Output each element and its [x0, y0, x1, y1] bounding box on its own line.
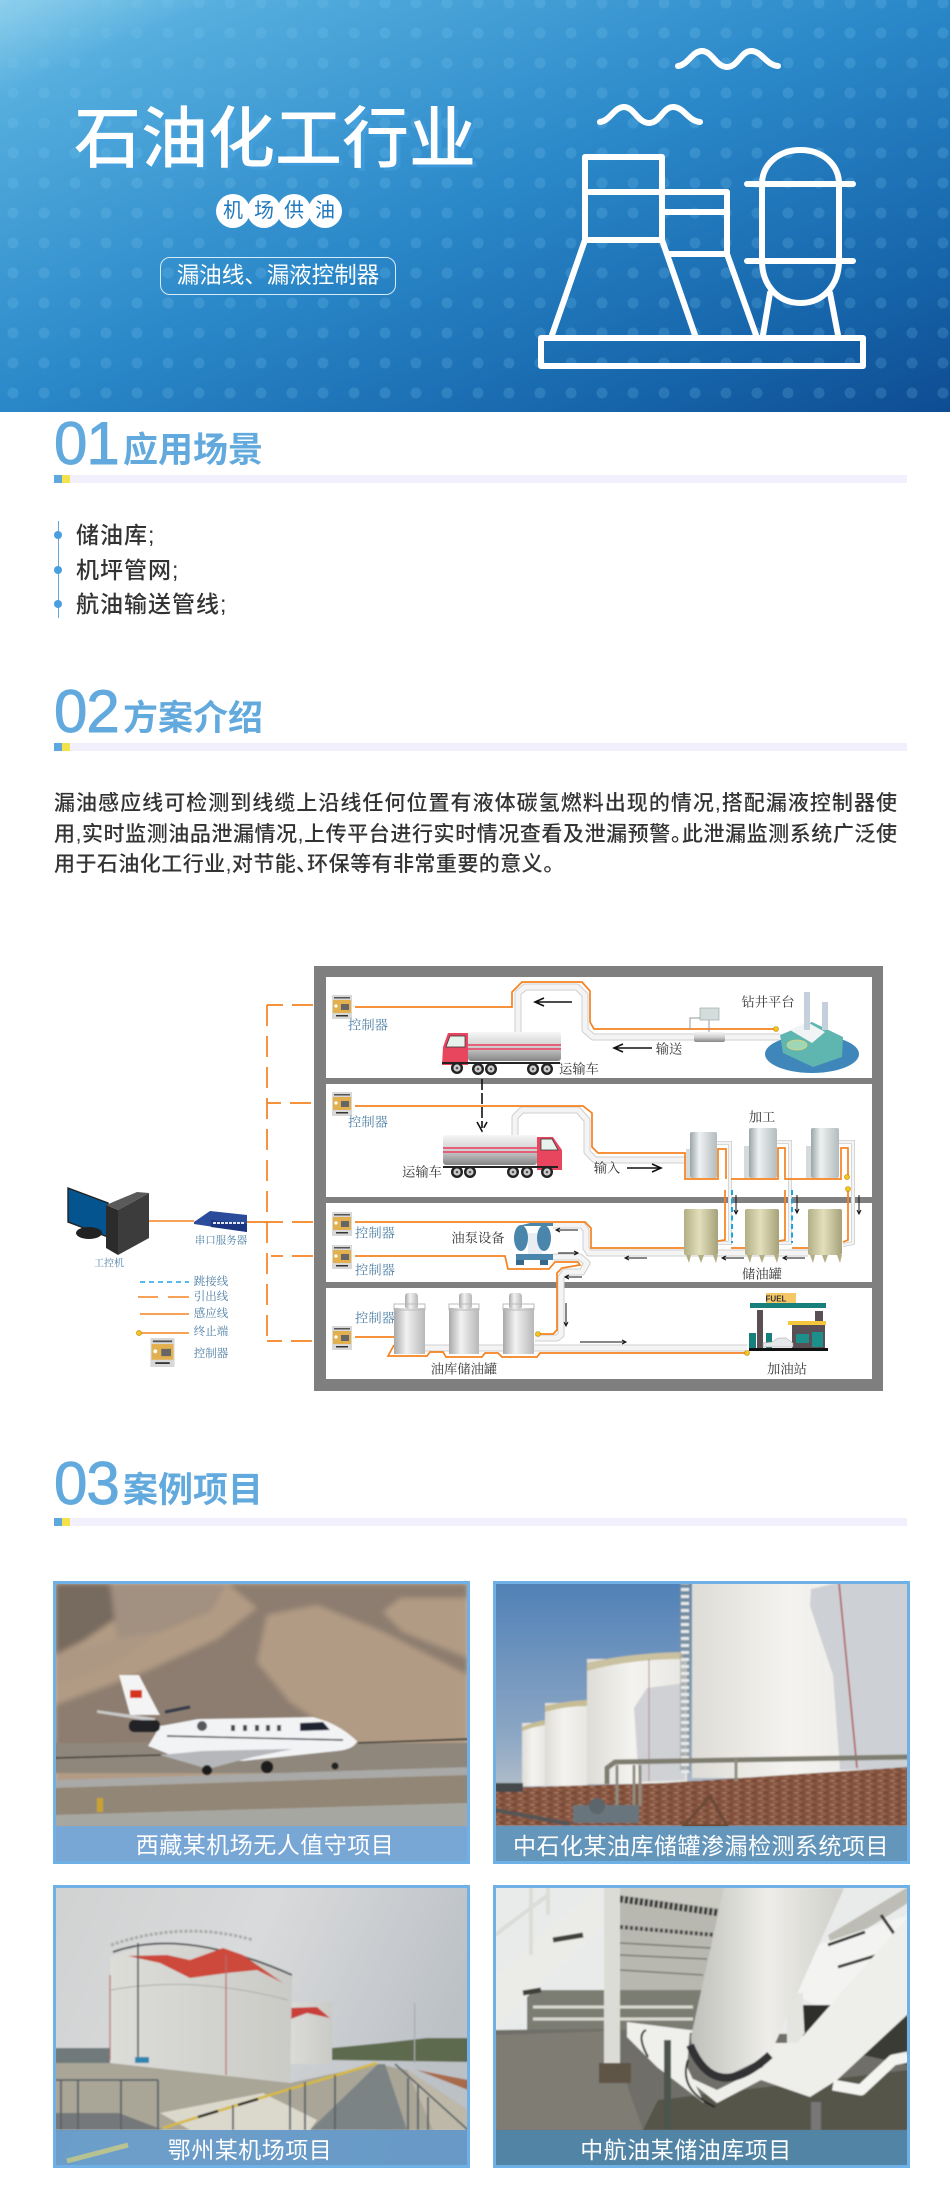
tanker truck 2: [443, 1135, 562, 1178]
solution paragraph: 用于石油化工行业,对节能、环保等有非常重要的意义。: [54, 853, 554, 876]
processing tanks: [686, 1128, 850, 1192]
header banner: [0, 0, 950, 412]
flow meter: [690, 1008, 725, 1042]
photo: CNAF oil depot: 中航油某储油库项目: [580, 2137, 792, 2163]
legend: 跳接线: [194, 1274, 229, 1288]
labels: 加工: [749, 1110, 775, 1124]
legend: 引出线: [194, 1289, 229, 1303]
section heading 01: 01: [54, 410, 119, 477]
product tag: 漏油线、漏液控制器: 漏油线、漏液控制器: [177, 263, 379, 288]
photo: Ezhou airport: [53, 1885, 470, 2168]
title: 石油化工行业: [74, 102, 476, 177]
subtitle pills: 机场供油: 油: [315, 200, 335, 222]
controllers: 控制器: [348, 1016, 388, 1032]
photo: Ezhou airport: 鄂州某机场项目: [168, 2137, 332, 2163]
application list: [54, 521, 62, 618]
photo: Sinopec tanks: [493, 1581, 910, 1864]
plane: [97, 1675, 357, 1775]
section heading 02: [54, 678, 907, 751]
labels: 输送: [656, 1042, 682, 1056]
solution paragraph: 用,实时监测油品泄漏情况,上传平台进行实时情况查看及泄漏预警。此泄漏监测系统广泛使: [54, 823, 897, 846]
section heading 03: 03: [54, 1450, 119, 1517]
sensing cable lines: [355, 982, 848, 1357]
section heading 02: 02: [54, 678, 119, 745]
photo: CNAF oil depot: [493, 1885, 910, 2168]
labels: 储油罐: [742, 1266, 782, 1282]
section heading 03: [54, 1450, 907, 1526]
legend: 终止端: [194, 1324, 229, 1338]
section heading 03: 案例项目: [123, 1471, 263, 1510]
storage tanks: [684, 1209, 842, 1263]
subtitle pills: 机场供油: [216, 194, 342, 228]
icon: fuel station: [744, 1293, 828, 1356]
photo: Tibet airport: [53, 1581, 470, 1864]
label: 运输车: [559, 1062, 599, 1076]
icon: serial server: [194, 1211, 247, 1232]
photo: Sinopec tanks: 中石化某油库储罐渗漏检测系统项目: [513, 1833, 889, 1859]
lead-out dashed lines: [247, 1005, 313, 1341]
section heading 02: 方案介绍: [123, 699, 263, 738]
labels: [431, 994, 807, 1376]
connection line: [149, 1220, 194, 1222]
building frame: [314, 966, 883, 1391]
section heading 01: [54, 410, 907, 483]
section heading 01: 应用场景: [123, 431, 263, 470]
icon: drilling platform: [765, 992, 859, 1073]
subtitle pills: 机场供油: 供: [284, 200, 304, 222]
list item: 储油库;: [76, 522, 155, 548]
labels: 钻井平台: [741, 994, 795, 1010]
label: 串口服务器: [195, 1234, 248, 1246]
pipes: [425, 987, 853, 1348]
label: 工控机: [94, 1256, 124, 1270]
labels: 油库储油罐: [431, 1360, 497, 1376]
list item: 航油输送管线;: [76, 591, 227, 617]
label: 运输车: [402, 1164, 442, 1180]
list item: 机坪管网;: [76, 557, 179, 583]
oil depot tanks: [394, 1293, 540, 1354]
tanker truck 1: [442, 1032, 561, 1075]
controllers: 控制器: [355, 1310, 395, 1326]
legend: 感应线: [194, 1306, 229, 1320]
icon: fuel station: FUEL: [766, 1294, 787, 1304]
controllers: 控制器: [355, 1224, 395, 1240]
labels: 加油站: [767, 1360, 807, 1376]
icon: oil pump: [514, 1223, 553, 1265]
labels: 输入: [594, 1160, 620, 1176]
legend: 控制器: [194, 1346, 229, 1360]
subtitle pills: 机场供油: 机: [223, 200, 243, 222]
icon: petrochemical plant: [541, 51, 863, 366]
solution paragraph: 漏油感应线可检测到线缆上沿线任何位置有液体碳氢燃料出现的情况,搭配漏液控制器使: [54, 792, 897, 815]
subtitle pills: 机场供油: 场: [254, 200, 274, 222]
legend: [136, 1274, 229, 1367]
controllers: 控制器: [348, 1114, 388, 1130]
solution paragraph: [54, 792, 897, 876]
arrows: [477, 998, 861, 1344]
system diagram: [67, 966, 883, 1391]
photo: Tibet airport: 西藏某机场无人值守项目: [136, 1832, 394, 1858]
labels: 油泵设备: [451, 1230, 505, 1246]
product tag: 漏油线、漏液控制器: [160, 257, 396, 295]
controllers: [332, 995, 395, 1350]
controllers: 控制器: [355, 1262, 395, 1278]
icon: industrial computer: [68, 1188, 149, 1255]
